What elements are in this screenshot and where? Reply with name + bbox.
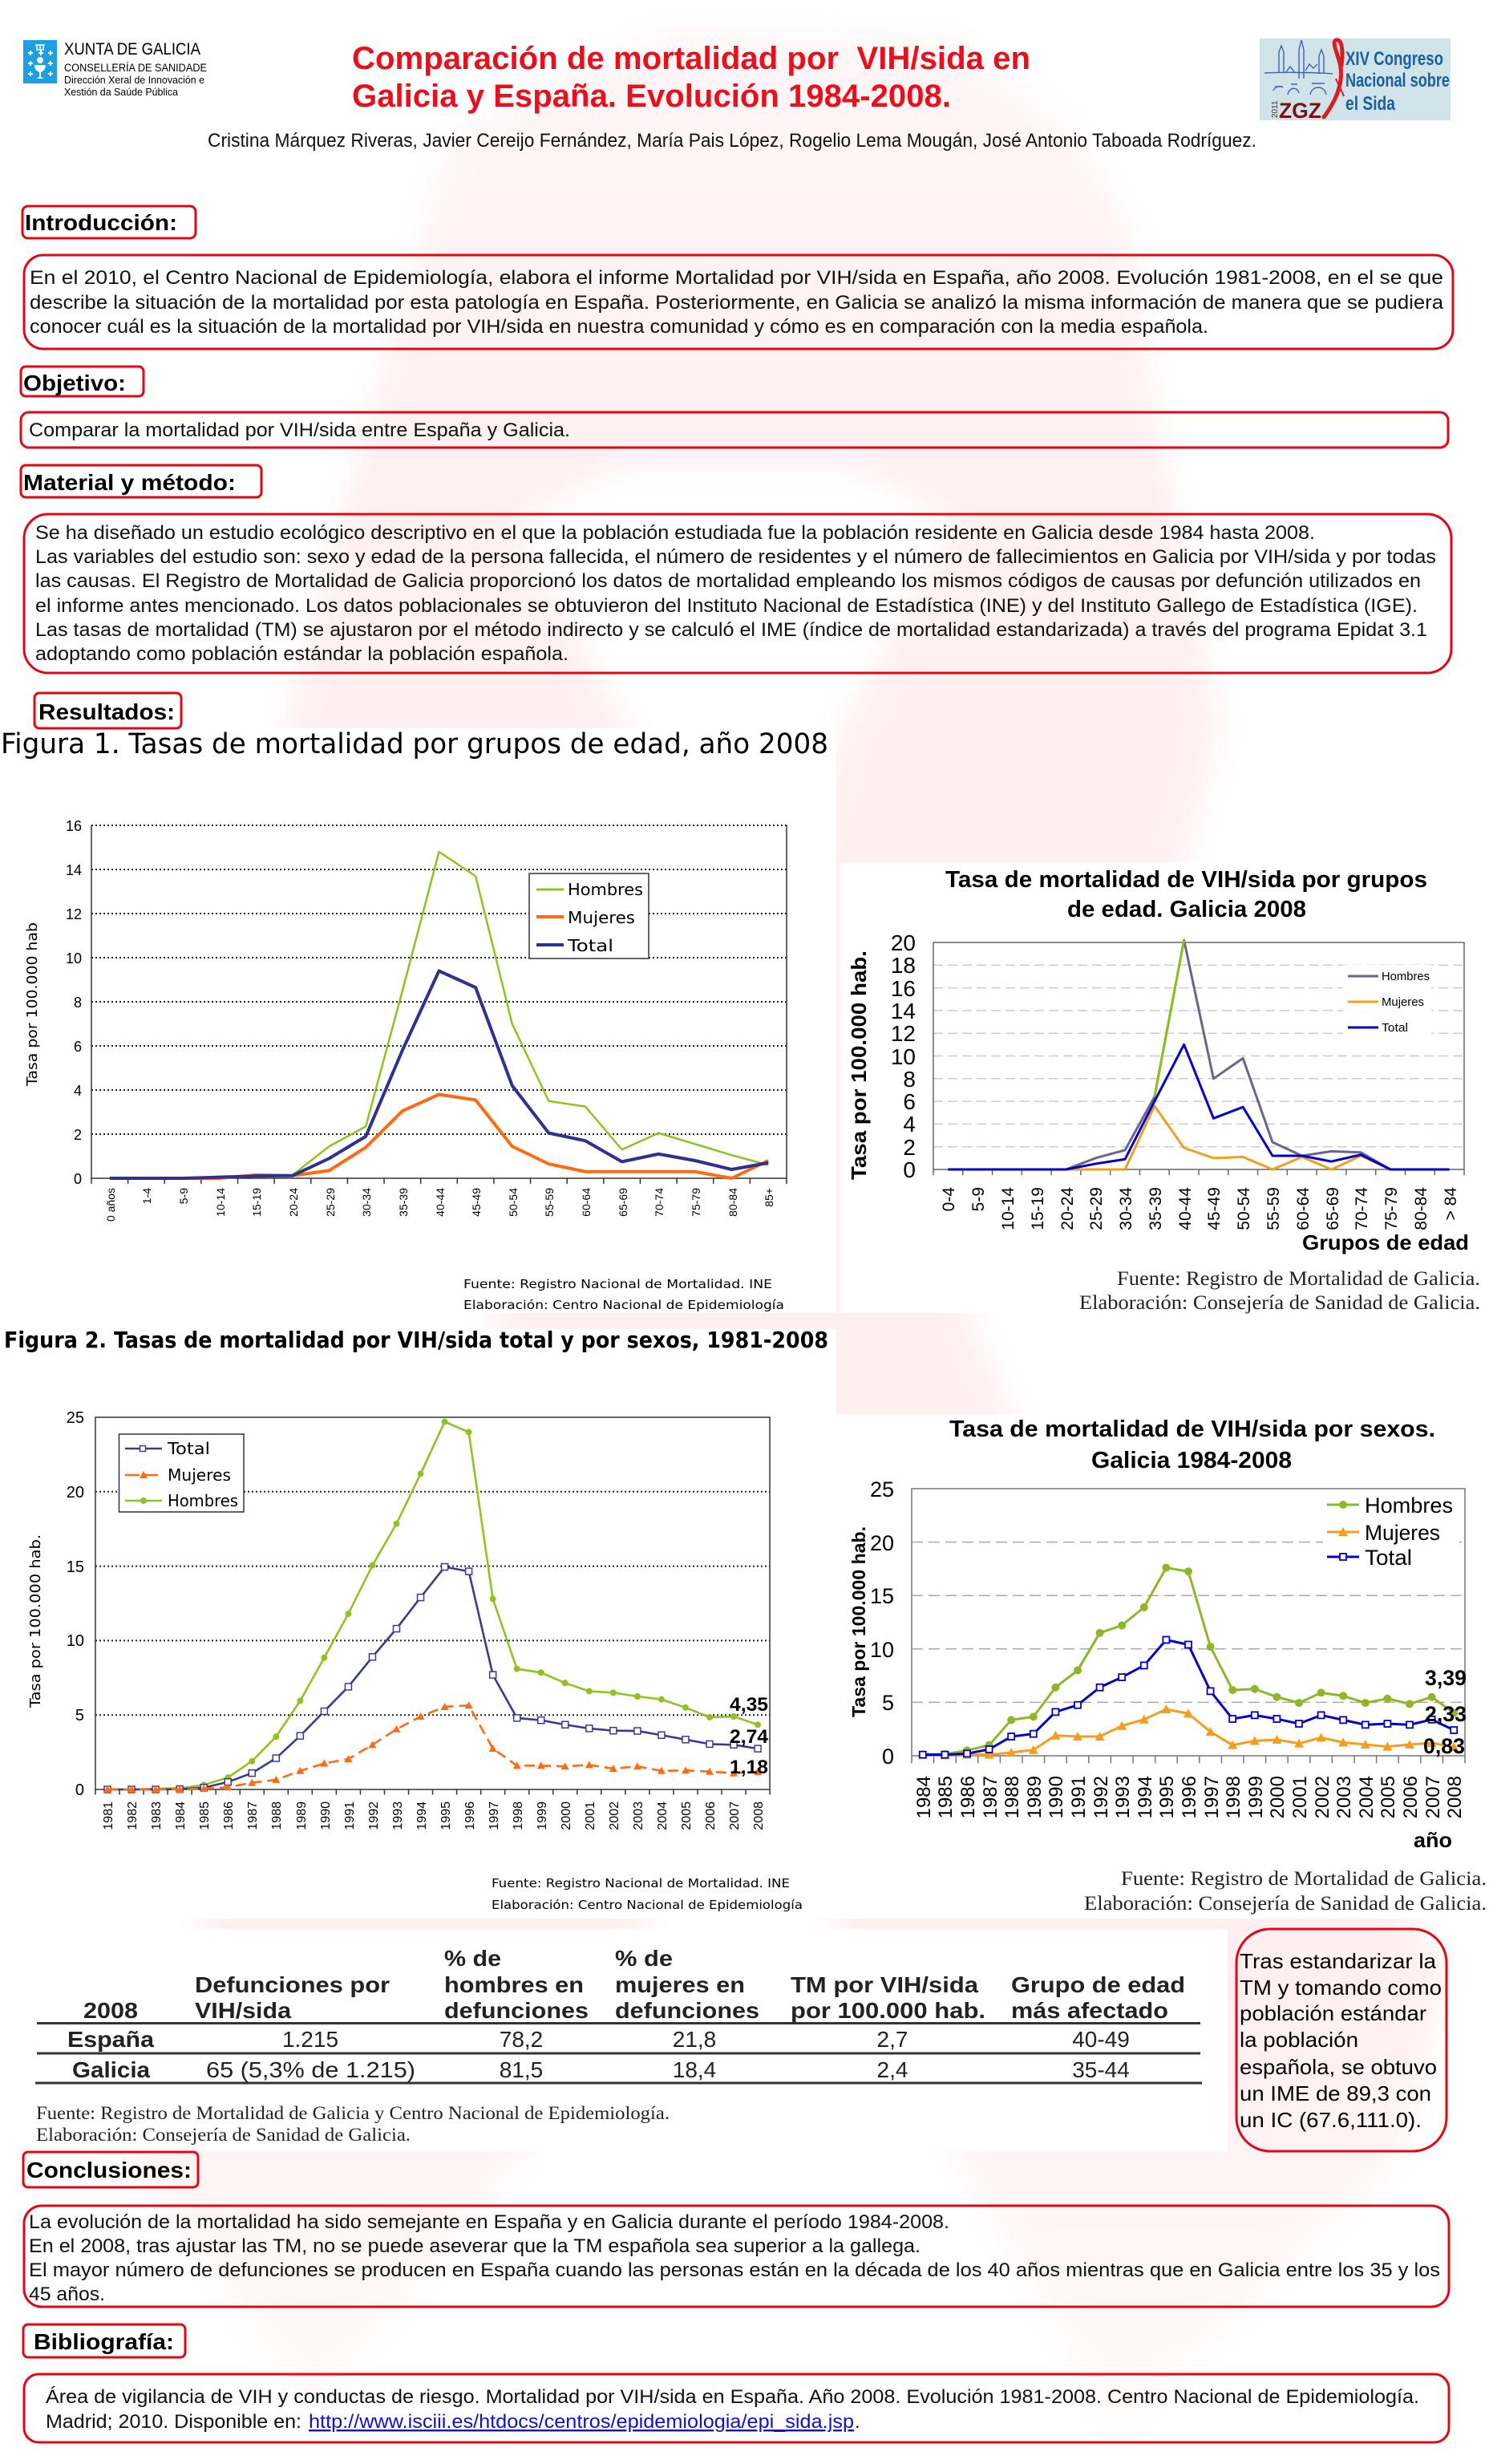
legend: Mujeres [1382, 995, 1424, 1009]
panel: methods text: Se ha diseñado un estudio ecológico descriptivo en el que la población estudiada fue la población residente en Galicia desde 1984 hasta 2008. [35, 522, 1315, 544]
x axis labels: 65-69 [1324, 1187, 1342, 1230]
x axis labels: 2002 [1312, 1776, 1333, 1818]
table header: VIH/sida [195, 1998, 291, 2023]
legend: Mujeres [1365, 1521, 1440, 1545]
y axis labels: 20 [870, 1531, 894, 1555]
x axis labels: 1991 [343, 1801, 357, 1830]
x axis title: año [1414, 1828, 1452, 1852]
x axis labels: 2003 [1333, 1776, 1355, 1818]
y axis labels: 4 [903, 1112, 916, 1137]
x axis labels: 2005 [1378, 1776, 1399, 1818]
panel: bibliography: Madrid; 2010. Disponible en: [46, 2411, 301, 2433]
heading: Material y método [21, 465, 261, 497]
line: Hombres [948, 940, 1450, 1169]
line: Total [923, 1639, 1454, 1755]
x axis labels: 2003 [632, 1801, 645, 1830]
x axis labels: 0 años [104, 1188, 117, 1222]
end-of-line value labels: 0,83 [1423, 1734, 1465, 1758]
y axis labels: 15 [870, 1584, 894, 1608]
x axis labels: 1981 [102, 1801, 115, 1830]
x axis labels: 1989 [295, 1801, 309, 1830]
y axis labels: 10 [870, 1638, 894, 1662]
x axis labels: 35-39 [1147, 1187, 1165, 1230]
table header: hombres en [444, 1972, 584, 1997]
x axis labels [104, 1188, 775, 1222]
x axis labels [940, 1187, 1460, 1230]
legend: Mujeres [168, 1465, 231, 1485]
logo: Xunta de Galicia: CONSELLERÍA DE SANIDADE [64, 62, 207, 74]
panel: methods text: adoptando como población estándar la población española. [35, 643, 568, 665]
x axis labels: 1-4 [140, 1188, 153, 1204]
x axis labels: 1996 [1179, 1776, 1200, 1818]
y axis labels [891, 930, 916, 1182]
title: Comparación de mortalidad por VIH/sida en [352, 41, 1030, 76]
heading: Bibliografía: Bibliografía: [34, 2329, 174, 2354]
row: España: 78,2 [500, 2027, 543, 2052]
x axis labels: 40-44 [1176, 1187, 1195, 1230]
y axis labels: 20 [891, 930, 916, 955]
panel: methods text: Las tasas de mortalidad (TM) se ajustaron por el método indirecto y se calculó el IME (índice de mortalidad estandarizada) a través del programa Epidat 3.1 [35, 619, 1427, 641]
y axis title: Tasa por 100.000 hab. [27, 1534, 44, 1708]
panel: conclusions text: La evolución de la mortalidad ha sido semejante en España y en Galicia durante el período 1984-2008. [29, 2211, 949, 2233]
x axis labels: 1997 [488, 1801, 501, 1830]
legend [119, 1434, 244, 1512]
chart title [945, 867, 1427, 922]
heading: Objetivo [21, 367, 144, 396]
x axis labels: 1994 [1135, 1776, 1156, 1818]
y axis labels: 4 [74, 1083, 82, 1099]
y axis labels: 2 [74, 1127, 82, 1143]
y axis labels: 16 [66, 818, 82, 834]
panel: introduction text [24, 255, 1453, 349]
x axis labels: 15-19 [1029, 1187, 1047, 1230]
x axis labels: 2005 [680, 1801, 694, 1830]
panel: methods text: Las variables del estudio son: sexo y edad de la persona fallecida, el número de residentes y el número de fallecimientos en Galicia por VIH/sida y por todas [35, 546, 1436, 568]
table source: Elaboración: Consejería de Sanidad de Galicia. [36, 2125, 411, 2145]
y axis labels [67, 1409, 84, 1799]
panel: introduction text: conocer cuál es la situación de la mortalidad por VIH/sida en nuestra comunidad y cómo es en comparación con la media española. [30, 316, 1208, 338]
row: Galicia: 2,4 [877, 2057, 908, 2082]
y axis labels: 10 [66, 950, 82, 967]
y axis labels: 10 [891, 1044, 916, 1069]
authors: Cristina Márquez Riveras, Javier Cereijo Fernández, María Pais López, Rogelio Lema Mougán, José Antonio Taboada Rodríguez. [208, 130, 1256, 152]
x axis labels: 1986 [222, 1801, 236, 1830]
x axis labels: 80-84 [1412, 1187, 1430, 1230]
heading: Material y método: Material y método: [23, 470, 236, 495]
x axis labels: 40-44 [434, 1188, 447, 1217]
legend: Hombres [1382, 970, 1430, 983]
heading: Conclusiones: Conclusiones: [26, 2158, 192, 2182]
x axis labels: 2001 [584, 1801, 597, 1830]
row: España: 21,8 [673, 2027, 716, 2052]
y axis labels: 5 [75, 1707, 84, 1724]
x axis title: Grupos de edad [1302, 1230, 1469, 1254]
y axis labels: 14 [891, 999, 916, 1023]
line: Hombres [923, 1568, 1454, 1755]
y axis labels: 0 [75, 1781, 84, 1799]
panel: bibliography: http://www.isciii.es/htdocs/centros/epidemiologia/epi_sida.jsp [309, 2411, 854, 2433]
chart title: de edad. Galicia 2008 [1067, 897, 1306, 922]
logo: XIV Congreso Nacional sobre el Sida: 2011 [1271, 100, 1280, 118]
y axis labels: 25 [870, 1477, 894, 1502]
end-of-line value labels: 2,33 [1425, 1702, 1467, 1726]
x axis labels: 10-14 [999, 1187, 1018, 1230]
chart: mortality by age, Galicia 2008 [847, 867, 1480, 1314]
row: Galicia [72, 2057, 1130, 2082]
white backing behind figure 1 [0, 728, 836, 1313]
x axis labels: 2004 [656, 1801, 670, 1830]
x axis labels: 55-59 [543, 1188, 556, 1217]
logo: Xunta de Galicia: Xestión da Saúde Pública [64, 86, 179, 98]
row: Galicia: Galicia [72, 2057, 150, 2082]
table header: defunciones [444, 1998, 589, 2023]
y axis title: Tasa por 100.000 hab. [847, 950, 871, 1180]
source: Fuente: Registro Nacional de Mortalidad. INE [492, 1876, 790, 1891]
table source [36, 2103, 670, 2145]
x axis labels: 45-49 [1205, 1187, 1224, 1230]
x axis labels: 50-54 [507, 1188, 520, 1217]
logo: XIV Congreso Nacional sobre el Sida: XIV Congreso [1345, 48, 1443, 70]
legend [1343, 965, 1431, 1037]
source [463, 1277, 784, 1312]
y axis labels [66, 818, 82, 1187]
y axis labels: 0 [74, 1171, 82, 1187]
x axis labels: 1987 [980, 1776, 1001, 1818]
x axis labels: 2001 [1289, 1776, 1311, 1818]
white backing behind table [0, 1929, 1228, 2151]
x axis labels: 2006 [1400, 1776, 1422, 1818]
x axis labels: 20-24 [287, 1188, 300, 1217]
legend: Hombres [1365, 1493, 1453, 1518]
row: España [67, 2027, 1130, 2052]
row: Galicia: 35-44 [1072, 2057, 1130, 2082]
y axis labels: 14 [66, 862, 82, 878]
line: Hombres [107, 1422, 758, 1789]
heading: Resultados: Resultados: [38, 699, 175, 724]
chart title: Galicia 1984-2008 [1091, 1448, 1292, 1473]
x axis labels: 1999 [1245, 1776, 1267, 1818]
heading: Introducción [22, 206, 196, 238]
source [1079, 1268, 1480, 1314]
title [352, 41, 1030, 114]
end-of-line value labels: 1,18 [730, 1757, 768, 1778]
logo: XIV Congreso Nacional sobre el Sida: Nacional sobre [1345, 70, 1450, 91]
table header: por 100.000 hab. [791, 1998, 985, 2023]
line: Hombres [110, 852, 768, 1178]
x axis labels: 1996 [463, 1801, 477, 1830]
end-of-line value labels [730, 1694, 769, 1778]
x axis labels: 1990 [1046, 1776, 1067, 1818]
y axis labels: 6 [74, 1039, 82, 1055]
x axis labels: 85+ [763, 1188, 775, 1207]
logo: XIV Congreso Nacional sobre el Sida: el Sida [1345, 93, 1396, 115]
legend: Mujeres [568, 908, 635, 927]
panel: objective text [21, 412, 1448, 448]
y axis labels: 0 [903, 1157, 916, 1182]
x axis labels: 1987 [246, 1801, 260, 1830]
x axis labels: 1998 [512, 1801, 525, 1830]
line: Hombres peak segment [1155, 940, 1184, 1096]
x axis labels: 75-79 [690, 1188, 702, 1217]
row: Galicia: 81,5 [500, 2057, 543, 2082]
panel: conclusions text: En el 2008, tras ajustar las TM, no se puede aseverar que la TM española sea superior a la gallega. [29, 2235, 921, 2257]
x axis labels: 1999 [536, 1801, 549, 1830]
panel: bibliography: . [855, 2411, 860, 2433]
x axis labels: 1984 [913, 1776, 935, 1818]
y axis labels: 0 [882, 1745, 894, 1769]
table source: Fuente: Registro de Mortalidad de Galicia y Centro Nacional de Epidemiología. [36, 2103, 670, 2123]
figure 2 heading: Figura 2. Tasas de mortalidad por VIH/sida total y por sexos, 1981-2008 [4, 1327, 828, 1353]
x axis labels: 75-79 [1382, 1187, 1401, 1230]
y axis labels: 12 [891, 1021, 916, 1046]
source [492, 1876, 803, 1912]
x axis labels: 1992 [367, 1801, 381, 1830]
row: España: España [67, 2027, 154, 2052]
panel: conclusions text: 45 años. [29, 2284, 105, 2305]
panel: objective text: Comparar la mortalidad por VIH/sida entre España y Galicia. [29, 419, 570, 441]
x axis labels: 1995 [439, 1801, 453, 1830]
panel: introduction text: En el 2010, el Centro Nacional de Epidemiología, elabora el informe Mortalidad por VIH/sida en España, año 2008. Evolución 1981-2008, en el se que [30, 267, 1443, 289]
line: Total [110, 971, 768, 1178]
x axis labels: 2002 [608, 1801, 621, 1830]
x axis labels: 55-59 [1264, 1187, 1283, 1230]
panel: conclusions text: El mayor número de defunciones se producen en España cuando las personas están en la década de los 40 años mientras que en Galicia entre los 35 y los [29, 2259, 1440, 2281]
panel: conclusions text [24, 2206, 1449, 2307]
line: Total [948, 1044, 1450, 1169]
source: Fuente: Registro Nacional de Mortalidad. INE [463, 1277, 772, 1291]
end-of-line value labels [1423, 1666, 1467, 1758]
x axis labels: 1994 [415, 1801, 429, 1830]
panel: methods text: el informe antes mencionado. Los datos poblacionales se obtuvieron del Instituto Nacional de Estadística (INE) y del Instituto Gallego de Estadística (IGE). [35, 595, 1418, 617]
chart: mortality by age, Spain 2008 [24, 818, 787, 1312]
x axis labels: 1998 [1223, 1776, 1244, 1818]
panel: methods text: las causas. El Registro de Mortalidad de Galicia proporcionó los datos de mortalidad empleando los mismos códigos de causas por defunción utilizados en [35, 570, 1421, 592]
x axis labels: 70-74 [653, 1188, 666, 1217]
end-of-line value labels: 4,35 [730, 1694, 768, 1716]
x axis labels: 1992 [1090, 1776, 1112, 1818]
y axis labels: 8 [74, 995, 82, 1011]
table header: TM por VIH/sida [791, 1972, 978, 1997]
line: Mujeres [107, 1705, 758, 1789]
x axis labels: 60-64 [580, 1188, 593, 1217]
panel: bibliography [24, 2374, 1449, 2442]
logo: XIV Congreso Nacional sobre el Sida: ZGZ [1279, 99, 1321, 123]
line: Mujeres [110, 1094, 768, 1178]
callout: IME result: un IME de 89,3 con [1240, 2081, 1431, 2105]
chart: mortality by sex, Spain 1981-2008 [27, 1409, 803, 1912]
heading: Bibliografía [23, 2324, 185, 2357]
x axis labels: 25-29 [324, 1188, 337, 1217]
x axis labels: 1984 [174, 1801, 188, 1830]
callout: IME result: TM y tomando como [1240, 1976, 1442, 2000]
row: España: 2,7 [877, 2027, 908, 2052]
x axis labels: 20-24 [1058, 1187, 1077, 1230]
y axis labels: 25 [67, 1409, 84, 1427]
x axis labels: 1993 [1112, 1776, 1134, 1818]
x axis labels: 5-9 [969, 1187, 988, 1211]
white backing behind Galicia age chart [840, 862, 1489, 1313]
x axis labels: 2007 [728, 1801, 742, 1830]
x axis labels: 1988 [270, 1801, 284, 1830]
source: Elaboración: Consejería de Sanidad de Galicia. [1084, 1893, 1487, 1915]
line: Mujeres [948, 1106, 1450, 1169]
source: Elaboración: Centro Nacional de Epidemiología [492, 1898, 803, 1912]
source: Elaboración: Centro Nacional de Epidemiología [463, 1298, 784, 1312]
x axis labels: 0-4 [940, 1187, 958, 1211]
panel: introduction text: describe la situación de la mortalidad por esta patología en España. Posteriormente, en Galicia se analizó la misma información de manera que se pudiera [30, 292, 1444, 314]
source: Fuente: Registro de Mortalidad de Galicia. [1117, 1268, 1480, 1290]
x axis labels: 2004 [1356, 1776, 1378, 1818]
table header: defunciones [615, 1998, 759, 2023]
x axis labels [913, 1776, 1466, 1818]
legend: Hombres [168, 1491, 238, 1510]
legend [1323, 1490, 1459, 1570]
x axis labels: 30-34 [360, 1188, 373, 1217]
x axis labels: 1983 [150, 1801, 164, 1830]
logo: Xunta de Galicia: Dirección Xeral de Innovación e [64, 74, 204, 86]
y axis title: Tasa por 100.000 hab [24, 922, 41, 1087]
x axis labels [102, 1801, 766, 1830]
chart title [949, 1416, 1435, 1473]
heading: Resultados [34, 693, 181, 728]
x axis labels: 1991 [1068, 1776, 1090, 1818]
legend: Total [167, 1439, 210, 1458]
source: Fuente: Registro de Mortalidad de Galicia. [1121, 1868, 1487, 1890]
x axis labels: > 84 [1442, 1187, 1460, 1220]
x axis labels: 50-54 [1235, 1187, 1253, 1230]
y axis labels: 2 [903, 1135, 916, 1160]
chart title: Tasa de mortalidad de VIH/sida por grupos [945, 867, 1427, 893]
x axis labels: 5-9 [177, 1188, 190, 1204]
figure 1 heading: Figura 1. Tasas de mortalidad por grupos de edad, año 2008 [1, 728, 828, 760]
y axis labels: 6 [903, 1089, 916, 1114]
callout: IME result: Tras estandarizar la [1240, 1949, 1437, 1973]
legend: Total [1365, 1546, 1412, 1570]
y axis title: Tasa por 100.000 hab. [848, 1526, 869, 1717]
x axis labels: 65-69 [617, 1188, 629, 1217]
end-of-line value labels: 2,74 [730, 1726, 769, 1748]
x axis labels: 1989 [1024, 1776, 1046, 1818]
logo: XIV Congreso Nacional sobre el Sida [1260, 38, 1451, 123]
y axis labels: 12 [66, 906, 82, 922]
table header: % de [615, 1946, 673, 1971]
y axis labels: 18 [891, 953, 916, 978]
x axis labels: 70-74 [1353, 1187, 1371, 1230]
x axis labels: 2007 [1422, 1776, 1444, 1818]
logo: Xunta de Galicia [23, 40, 207, 98]
heading: Conclusiones [23, 2152, 198, 2187]
x axis labels: 1993 [391, 1801, 405, 1830]
table header: Grupo de edad [1011, 1972, 1185, 1997]
callout: IME result: española, se obtuvo [1240, 2055, 1437, 2079]
line: Total [107, 1567, 758, 1789]
x axis labels: 45-49 [470, 1188, 483, 1217]
source: Elaboración: Consejería de Sanidad de Galicia. [1079, 1292, 1480, 1314]
table header [83, 1946, 1185, 2023]
y axis labels: 16 [891, 976, 916, 1001]
legend [529, 873, 649, 958]
row: Galicia: 18,4 [673, 2057, 716, 2082]
heading: Introducción: Introducción: [25, 210, 177, 235]
callout: IME result: la población [1240, 2028, 1358, 2052]
panel: bibliography: Área de vigilancia de VIH y conductas de riesgo. Mortalidad por VIH/sida en España. Año 2008. Evolución 1981-2008. Centro Nacional de Epidemiología. [46, 2386, 1419, 2408]
callout: IME result [1236, 1929, 1447, 2151]
row: España: 1.215 [282, 2027, 338, 2052]
x axis labels: 2000 [560, 1801, 573, 1830]
table header: más afectado [1011, 1998, 1168, 2023]
x axis labels: 10-14 [214, 1188, 227, 1217]
callout: IME result: un IC (67.6,111.0). [1240, 2108, 1422, 2132]
x axis labels: 35-39 [397, 1188, 410, 1217]
callout: IME result: población estándar [1240, 2001, 1426, 2025]
table header: mujeres en [615, 1972, 745, 1997]
y axis labels: 8 [903, 1067, 916, 1092]
title: Galicia y España. Evolución 1984-2008. [352, 79, 951, 114]
y axis labels [870, 1477, 894, 1769]
logo: Xunta de Galicia: XUNTA DE GALICIA [64, 40, 200, 59]
table: comparison Spain vs Galicia [35, 1946, 1202, 2145]
row: Galicia: 65 (5,3% de 1.215) [206, 2057, 415, 2082]
x axis labels: 2000 [1267, 1776, 1289, 1818]
chart: mortality by sex, Galicia 1984-2008 [848, 1416, 1487, 1915]
y axis labels: 5 [882, 1691, 894, 1715]
x axis labels: 2006 [704, 1801, 718, 1830]
x axis labels: 1997 [1201, 1776, 1223, 1818]
panel: methods text [24, 514, 1451, 673]
x axis labels: 1988 [1001, 1776, 1023, 1818]
x axis labels: 60-64 [1294, 1187, 1313, 1230]
x axis labels: 1985 [198, 1801, 212, 1830]
x axis labels: 1995 [1156, 1776, 1178, 1818]
x axis labels: 2008 [1444, 1776, 1466, 1818]
y axis labels: 10 [67, 1632, 84, 1650]
row: España: 40-49 [1072, 2027, 1130, 2052]
x axis labels: 30-34 [1117, 1187, 1135, 1230]
x axis labels: 1985 [935, 1776, 957, 1818]
x axis labels: 2008 [752, 1801, 766, 1830]
heading: Objetivo: Objetivo: [23, 371, 126, 395]
legend: Hombres [568, 880, 643, 899]
x axis labels: 1986 [957, 1776, 979, 1818]
source [1084, 1868, 1487, 1915]
x axis labels: 15-19 [250, 1188, 263, 1217]
y axis labels: 15 [67, 1558, 84, 1576]
chart title: Tasa de mortalidad de VIH/sida por sexos. [949, 1416, 1435, 1442]
table header: 2008 [83, 1998, 138, 2023]
line: Mujeres [923, 1709, 1454, 1755]
x axis labels: 25-29 [1087, 1187, 1106, 1230]
table header: Defunciones por [195, 1972, 390, 1997]
end-of-line value labels: 3,39 [1425, 1666, 1467, 1690]
legend: Total [1382, 1021, 1408, 1035]
legend: Total [567, 936, 613, 955]
x axis labels: 1982 [126, 1801, 140, 1830]
x axis labels: 1990 [319, 1801, 333, 1830]
white backing behind Galicia sex chart [836, 1414, 1489, 1919]
white backing behind figure 2 [0, 1329, 836, 1919]
y axis labels: 20 [67, 1484, 84, 1502]
table header: % de [444, 1946, 501, 1971]
x axis labels: 80-84 [726, 1188, 739, 1217]
